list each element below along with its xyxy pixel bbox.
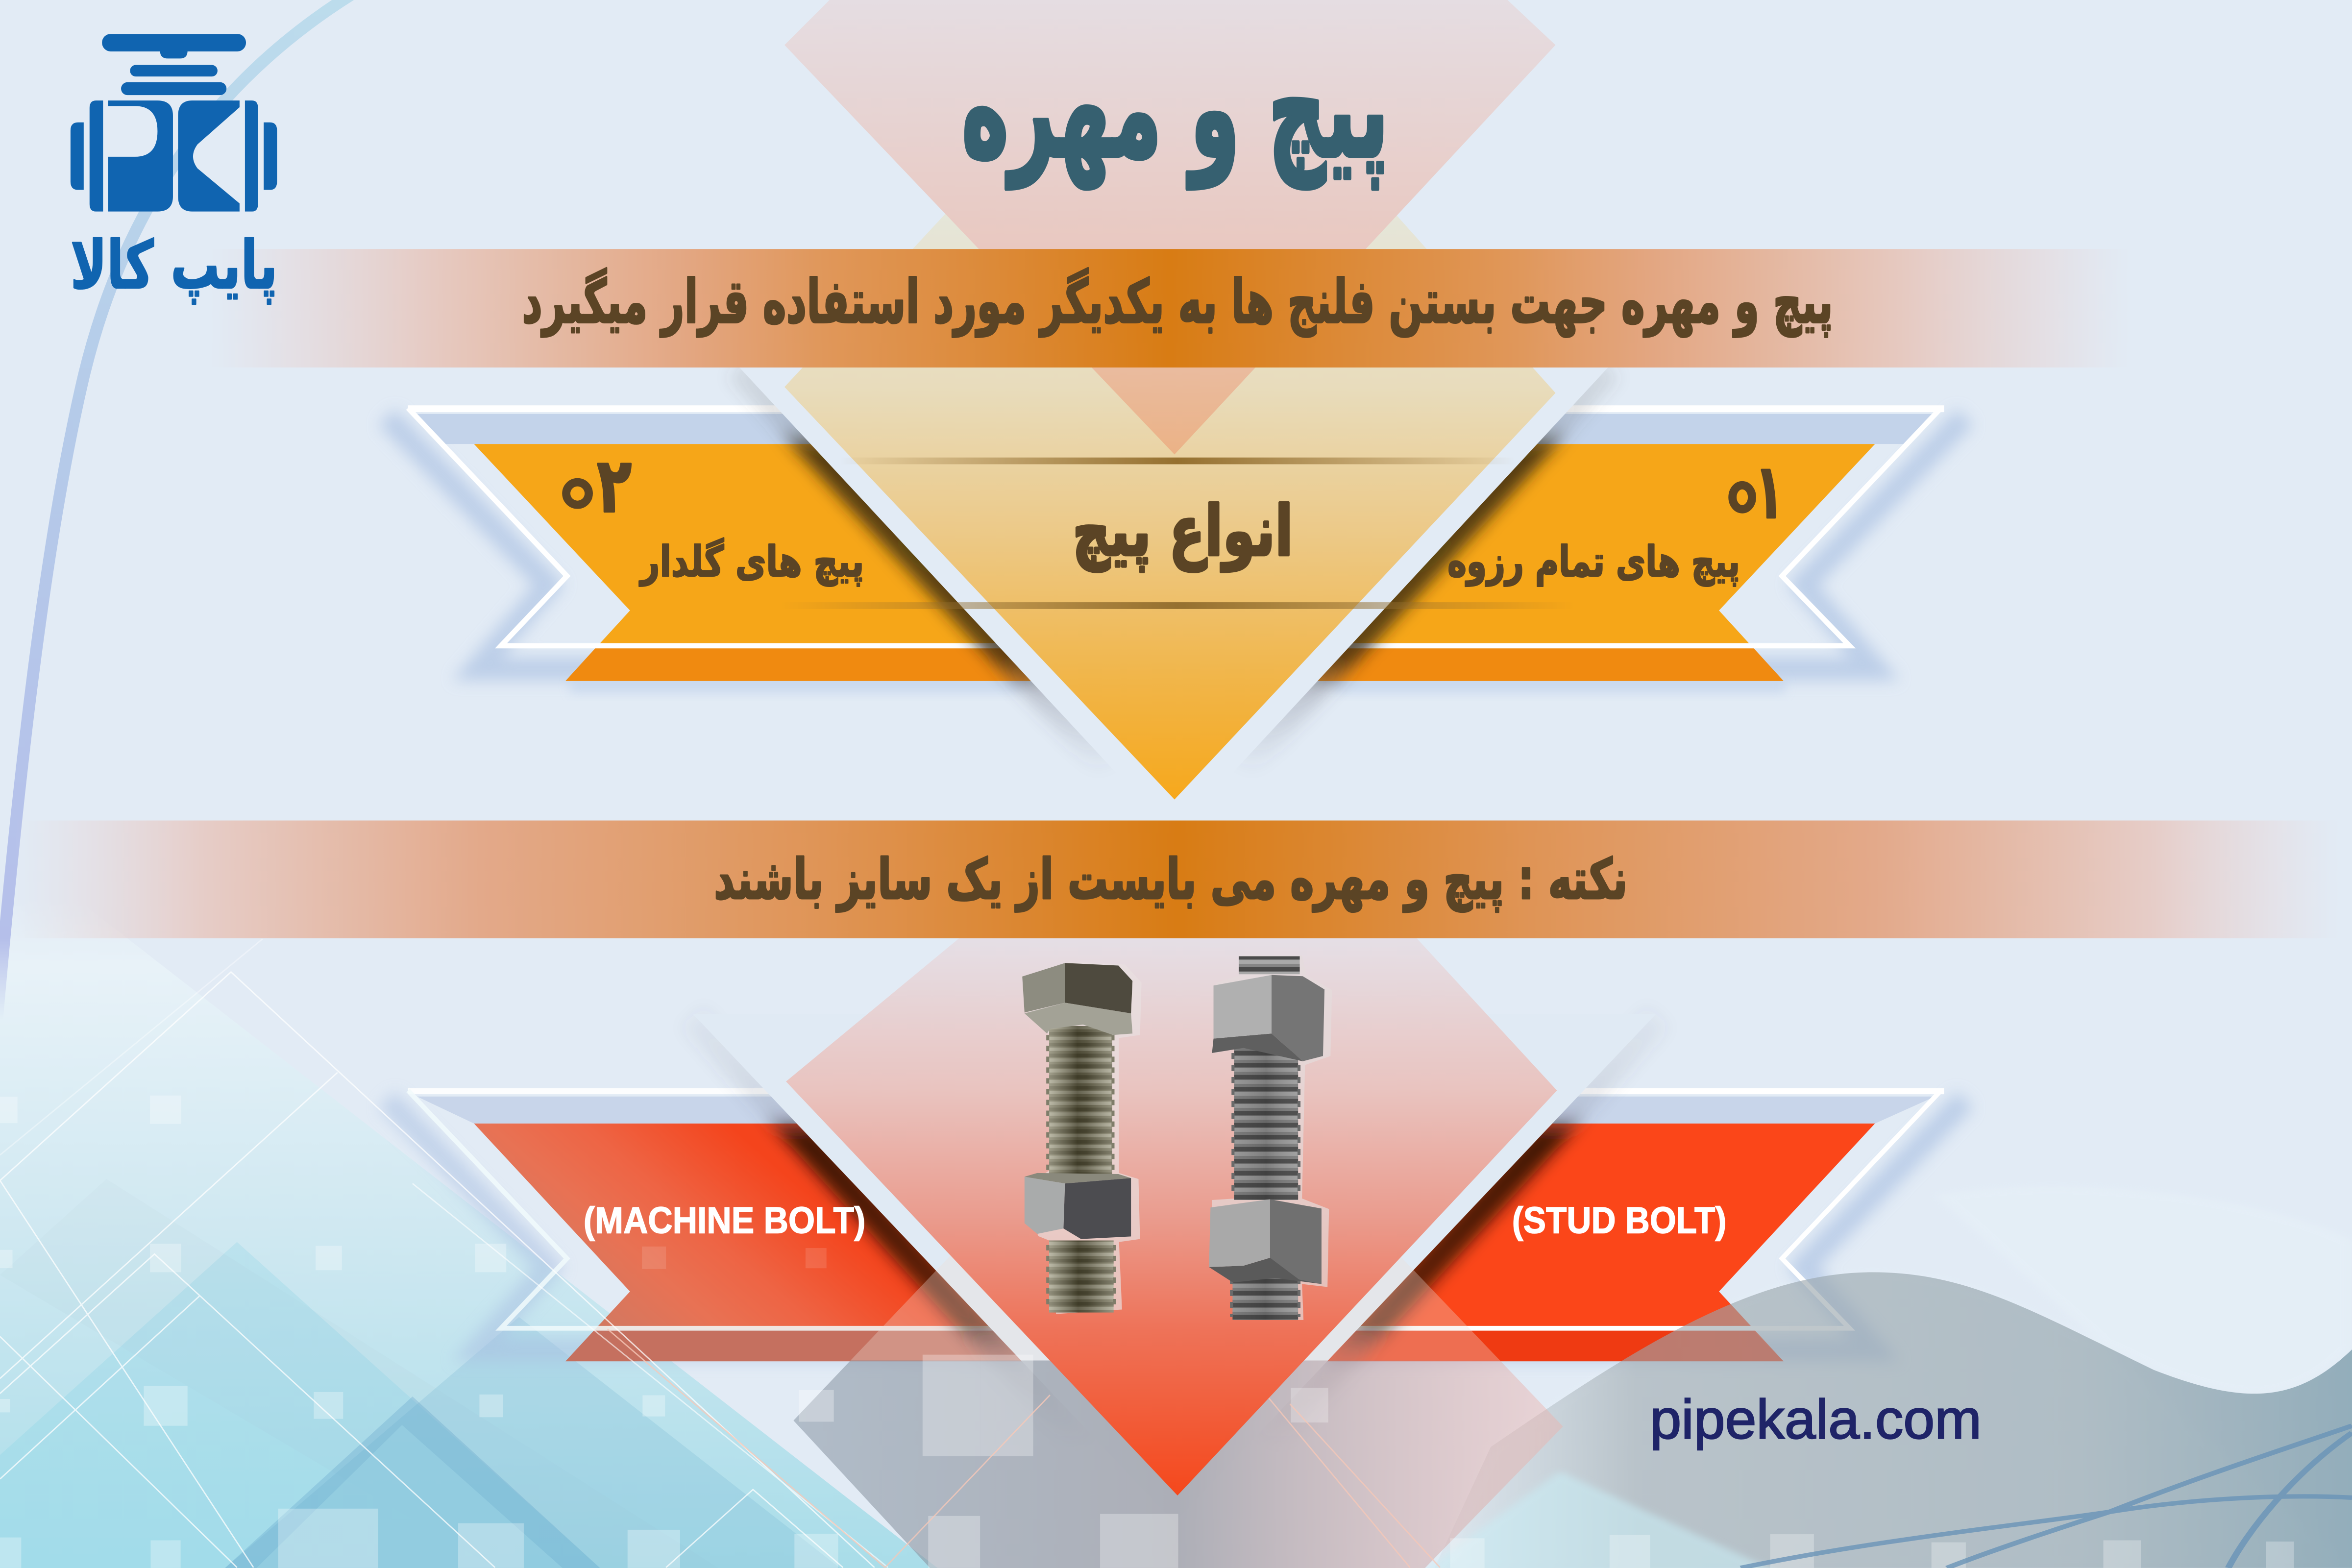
ribbon lower right xyxy=(1275,1091,1965,1361)
background: pale glow above wave xyxy=(1435,1186,2352,1568)
logo wordmark: پایپ کالا xyxy=(71,227,277,304)
number 01 xyxy=(1726,448,1784,536)
reflected lower diamond xyxy=(793,1020,1563,1568)
number 02: ۰۲ xyxy=(563,442,632,530)
panel: center label lines xyxy=(780,458,1575,609)
label: machine bolt: (MACHINE BOLT) xyxy=(584,1200,865,1241)
translucent squares right xyxy=(1291,1388,2294,1568)
ribbon left: halo and fill xyxy=(387,408,1065,693)
image: stud bolt xyxy=(1209,956,1332,1320)
label: studded type: پیچ های گلدار xyxy=(639,538,864,587)
translucent squares left xyxy=(0,1096,1178,1568)
logo xyxy=(71,34,277,304)
title: پیچ و مهره xyxy=(961,30,1389,190)
label: stud bolt: (STUD BOLT) xyxy=(1512,1200,1726,1241)
gap and shadow around lower center shape xyxy=(693,1014,1658,1522)
logo icon: valve xyxy=(71,34,277,212)
background: blue geometric shapes bottom left xyxy=(0,900,937,1568)
heading ribbons: shadow of inner gap xyxy=(739,368,1608,835)
label: fully threaded type: پیچ های تمام رزوه xyxy=(1447,538,1740,587)
decorative arc top left xyxy=(0,0,357,1020)
banner two text: نکته : پیچ و مهره می بایست از یک سایز باشند xyxy=(714,847,1627,912)
banner two xyxy=(15,820,2340,938)
blue curved lines bottom right xyxy=(1741,1426,2352,1568)
banner one xyxy=(210,249,2130,368)
image: machine bolt xyxy=(1022,961,1142,1314)
number 01: ۰۱ xyxy=(1726,448,1784,536)
thin pink lines in diamond xyxy=(608,1329,1440,1568)
top pink diamond xyxy=(784,0,1555,800)
center heading: types of bolts: انواع پیچ xyxy=(1073,491,1293,572)
wave overlay xyxy=(1410,1272,2352,1568)
ribbon lower left xyxy=(387,1091,1080,1361)
ribbon group: types (orange) xyxy=(387,408,1965,693)
ribbon group: bolt types (red) xyxy=(387,1091,1965,1361)
website: pipekala.com xyxy=(1650,1389,1982,1451)
ribbon right: halo and fill xyxy=(1290,408,1965,693)
lower center shape xyxy=(786,937,1557,1495)
thin white lines left xyxy=(0,939,888,1568)
